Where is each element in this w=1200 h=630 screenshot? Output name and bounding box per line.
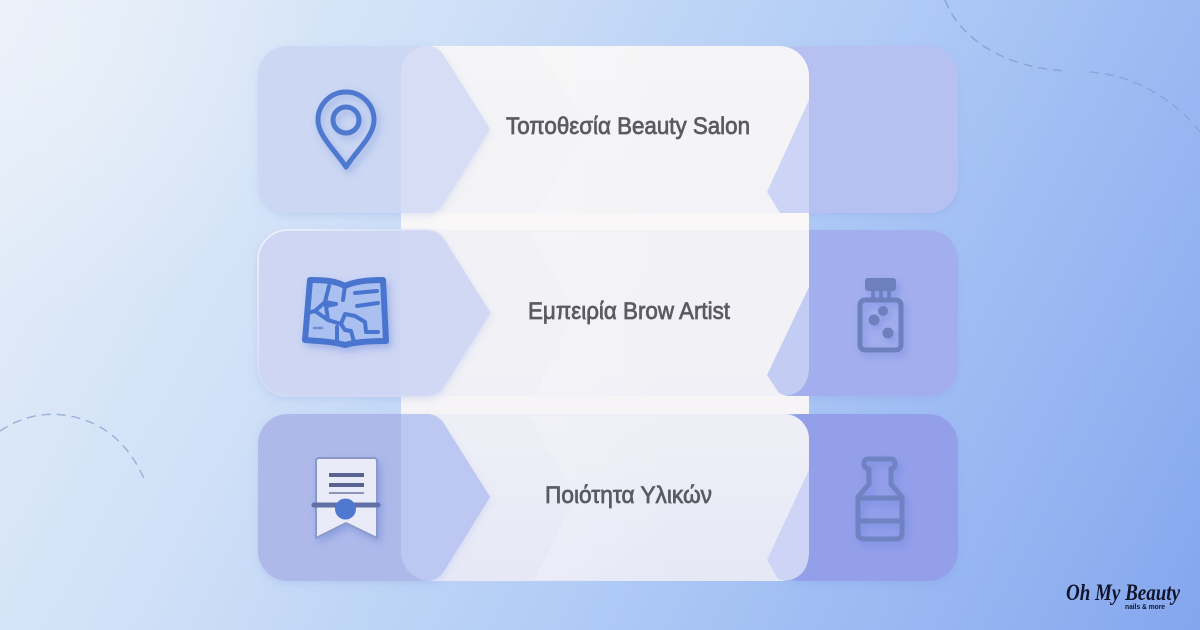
overlap area row 2 [401, 231, 490, 395]
row 3 wedge [767, 470, 809, 580]
right card: row 3 [770, 414, 958, 581]
icon: certificate with seal [314, 458, 378, 538]
panel: left chevron row 3 [258, 414, 490, 581]
row 2 wedge [767, 287, 809, 395]
heading: row 3: Ποιότητα Υλικών [545, 482, 712, 509]
icon: jar with dots [860, 279, 901, 350]
overlap area row 1 [401, 46, 490, 213]
panel: left chevron row 2 [258, 230, 490, 396]
icon: map [305, 280, 386, 345]
central light column [401, 46, 809, 581]
right card: row 2 [770, 230, 958, 396]
row separators [401, 213, 809, 414]
logo: Oh My Beauty [1066, 580, 1181, 605]
faint chevrons inside column [530, 46, 680, 580]
logo tagline: nails & more [1125, 602, 1165, 611]
row 1 wedge [767, 100, 809, 213]
heading: row 2: Εμπειρία Brow Artist [528, 298, 730, 325]
icon: location pin [318, 92, 374, 167]
right card: row 1 [770, 46, 958, 213]
heading: row 1: Τοποθεσία Beauty Salon [506, 113, 750, 140]
overlap area row 3 [401, 414, 490, 581]
decorative dashed curve: left [0, 414, 146, 483]
panel: left chevron row 1 [258, 46, 490, 213]
decorative dashed curve: top right [945, 0, 1200, 132]
icon: bottle [858, 459, 902, 539]
